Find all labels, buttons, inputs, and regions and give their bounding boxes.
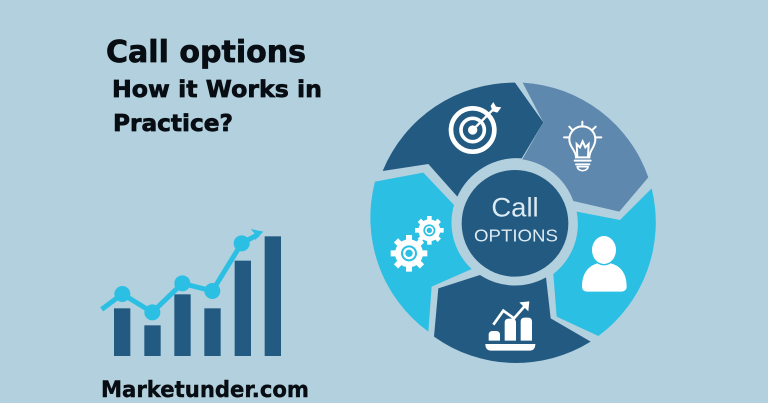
center label: Call xyxy=(491,193,539,223)
icon: growth chart xyxy=(485,301,535,351)
segment: bottom dark xyxy=(434,275,591,363)
center circle xyxy=(462,170,568,277)
trend line xyxy=(102,229,263,320)
subtitle: How it Works in xyxy=(112,75,322,103)
segment: right light blue xyxy=(553,188,656,336)
icon: person xyxy=(582,236,627,292)
website label: Marketunder.com xyxy=(101,378,309,403)
icon: target xyxy=(451,102,501,152)
icon: light bulb xyxy=(564,122,601,171)
segment: top dark xyxy=(383,83,543,197)
large gear xyxy=(391,235,427,272)
segment: left light blue xyxy=(370,173,472,332)
title: Call options xyxy=(106,35,306,70)
center label xyxy=(474,193,558,245)
bar chart with trend line xyxy=(102,229,281,356)
subtitle: Practice? xyxy=(113,109,233,137)
center label: OPTIONS xyxy=(474,225,558,245)
subtitle xyxy=(112,75,322,137)
segment: slate xyxy=(522,83,648,212)
process wheel xyxy=(370,83,656,363)
small gear xyxy=(415,216,444,245)
icon: gears xyxy=(391,216,444,272)
bars xyxy=(114,236,281,356)
